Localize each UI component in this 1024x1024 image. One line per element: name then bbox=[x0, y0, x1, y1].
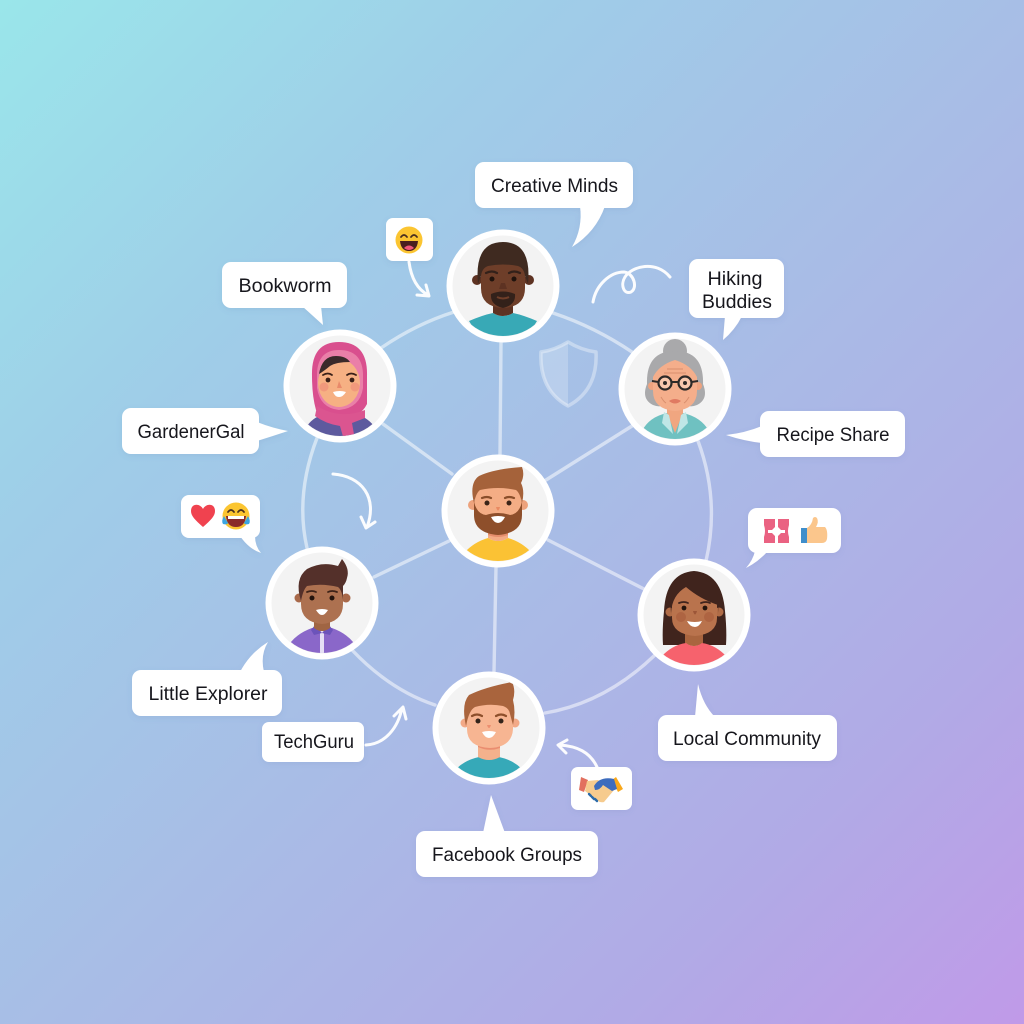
bubble: TechGuru: TechGuru bbox=[274, 732, 354, 753]
icon: handshake bbox=[579, 777, 623, 802]
bubble: Hiking Buddies bbox=[689, 259, 784, 340]
avatar: dark man with goatee, top bbox=[446, 230, 560, 342]
avatar: elderly woman with glasses bbox=[618, 332, 732, 446]
icon: pink puzzle bbox=[764, 519, 789, 543]
bubble: Creative Minds bbox=[475, 162, 633, 247]
icon: shield bbox=[541, 342, 596, 406]
bubble: Recipe Share bbox=[726, 411, 905, 457]
network connection lines bbox=[303, 312, 711, 713]
bubble: Bookworm: Bookworm bbox=[238, 276, 332, 297]
avatar: young man in purple bbox=[266, 546, 378, 660]
arrow: emoji to top avatar bbox=[409, 262, 429, 296]
bubble: Hiking Buddies: Hiking bbox=[708, 269, 762, 290]
bubble: GardenerGal bbox=[122, 408, 288, 454]
bubble: Little Explorer: Little Explorer bbox=[148, 684, 268, 705]
bubble: GardenerGal: GardenerGal bbox=[138, 422, 244, 443]
icon: tears of joy emoji bbox=[222, 502, 250, 530]
arrow: curved left ring bbox=[333, 474, 375, 528]
bubble: Local Community: Local Community bbox=[673, 729, 821, 750]
bubble: Recipe Share: Recipe Share bbox=[776, 425, 890, 446]
bubble: Bookworm bbox=[222, 262, 347, 325]
bubble: Hiking Buddies: Buddies bbox=[702, 292, 772, 313]
avatar: young man in teal, bottom bbox=[432, 672, 546, 784]
avatar: woman with long dark hair bbox=[638, 558, 750, 672]
bubble: Facebook Groups bbox=[416, 795, 598, 877]
bubble: Creative Minds: Creative Minds bbox=[491, 176, 618, 197]
arrow: TechGuru to bottom avatar bbox=[366, 707, 406, 745]
decorative curly arrow bbox=[593, 266, 670, 302]
avatar: woman in pink hijab bbox=[284, 330, 396, 442]
avatar: bearded man, centre bbox=[442, 454, 554, 568]
arrow: handshake to bottom avatar bbox=[558, 740, 597, 767]
icon: grinning emoji bbox=[396, 226, 422, 254]
bubble: Local Community bbox=[658, 684, 837, 761]
bubble: laughing emoji bbox=[386, 218, 433, 261]
bubble: reaction icons bbox=[746, 508, 841, 568]
icon: thumbs up bbox=[801, 517, 827, 543]
bubble: Facebook Groups: Facebook Groups bbox=[432, 845, 582, 866]
bubble: heart and laughing emoji bbox=[181, 495, 261, 553]
icon: heart bbox=[191, 505, 215, 527]
bubble: handshake bbox=[571, 767, 632, 810]
bubble: Little Explorer bbox=[132, 642, 282, 716]
bubble: TechGuru bbox=[262, 722, 364, 762]
